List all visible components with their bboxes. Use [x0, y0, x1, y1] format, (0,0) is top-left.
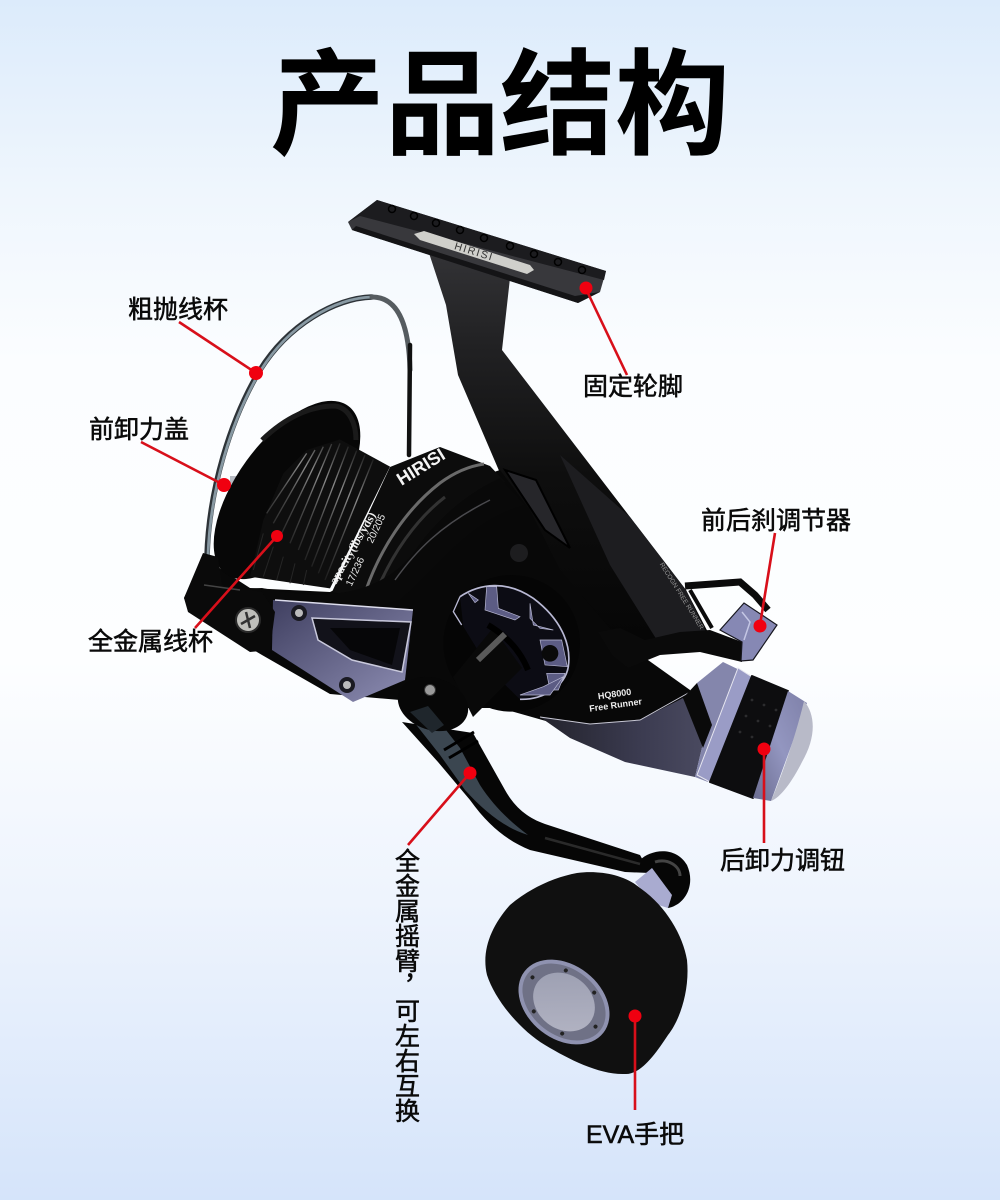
front bail arm	[184, 553, 275, 652]
main body	[184, 470, 705, 735]
crank head	[391, 668, 475, 740]
callout: EVA手把: EVA手把	[586, 1121, 684, 1149]
knob rubber grip	[710, 676, 788, 798]
crank collar	[444, 732, 478, 758]
body arc over spool	[208, 478, 525, 610]
callout: 粗抛线杯	[128, 296, 263, 380]
bail wire	[207, 297, 410, 556]
callout: 全金属摇臂: 摇	[395, 923, 420, 951]
rotor gear	[443, 575, 580, 712]
spool band	[326, 444, 505, 602]
callout: 后卸力调钮: 后卸力调钮	[720, 847, 845, 875]
knob end face	[771, 701, 813, 801]
rear housing	[540, 698, 705, 777]
callout: 全金属摇臂: 左	[395, 1023, 420, 1051]
callout: 粗抛线杯: 粗抛线杯	[128, 296, 228, 324]
callout: 前卸力盖	[89, 416, 231, 492]
callout: 固定轮脚	[580, 282, 683, 401]
callout: EVA手把	[586, 1010, 684, 1149]
callout: 全金属摇臂	[395, 766, 476, 1126]
callout: 全金属摇臂: 互	[395, 1073, 420, 1101]
callout: 全金属摇臂: 金	[395, 873, 420, 901]
model text: HQ8000	[597, 687, 632, 701]
brake lever wire	[685, 582, 768, 610]
crank shaft cone	[453, 625, 528, 717]
fishing reel illustration	[184, 200, 813, 1074]
handle knob joint	[635, 851, 690, 908]
knob outer ring	[753, 691, 807, 801]
reel arm and stem	[428, 250, 712, 660]
front cap tab	[230, 476, 242, 500]
fishing reel illustration: RECOGN FREE RUNNER	[658, 562, 705, 631]
callout: 前后刹调节器	[701, 507, 851, 632]
spool flange	[185, 376, 389, 604]
foot plate	[348, 200, 606, 303]
crank handle arm	[402, 712, 650, 873]
brake lever	[598, 628, 742, 668]
knob neck	[685, 662, 750, 782]
callout: 全金属线杯	[88, 530, 283, 656]
callout: 全金属摇臂: 臂	[395, 948, 420, 976]
spool band: HIRISI	[393, 444, 449, 489]
callout: 全金属摇臂: 属	[395, 898, 420, 926]
brand plate	[414, 231, 534, 274]
purple side plate	[272, 600, 413, 702]
fishing reel illustration: Free Runner	[589, 696, 643, 714]
arm window	[505, 470, 570, 548]
side screw	[510, 544, 528, 562]
foot plate: HIRISI	[453, 240, 495, 264]
callout: 固定轮脚: 固定轮脚	[583, 373, 683, 401]
callout: 全金属摇臂: 换	[395, 1098, 420, 1126]
spool ridged body	[250, 439, 390, 588]
callout: 后卸力调钮	[720, 742, 845, 875]
callout: 全金属线杯: 全金属线杯	[88, 628, 213, 656]
spool band: 17/236	[344, 555, 367, 588]
rear drag knob	[683, 662, 813, 801]
purple brake block	[720, 603, 777, 661]
callout: 全金属摇臂: 可	[395, 998, 420, 1026]
callout: 全金属摇臂: 右	[395, 1048, 420, 1076]
title: 产品结构	[270, 42, 730, 170]
callout: 全金属摇臂: 全	[395, 848, 420, 876]
callout: 前后刹调节器: 前后刹调节器	[701, 507, 851, 535]
spool band: 20/205	[365, 512, 388, 545]
spool band: apacity(lbs/yds)	[326, 510, 379, 586]
callout: 前卸力盖: 前卸力盖	[89, 416, 189, 444]
callout: 全金属摇臂: ，	[404, 957, 429, 985]
EVA grip	[485, 872, 688, 1074]
grip end cap	[502, 942, 626, 1062]
arm side face	[560, 455, 706, 645]
knob ring	[697, 668, 752, 782]
